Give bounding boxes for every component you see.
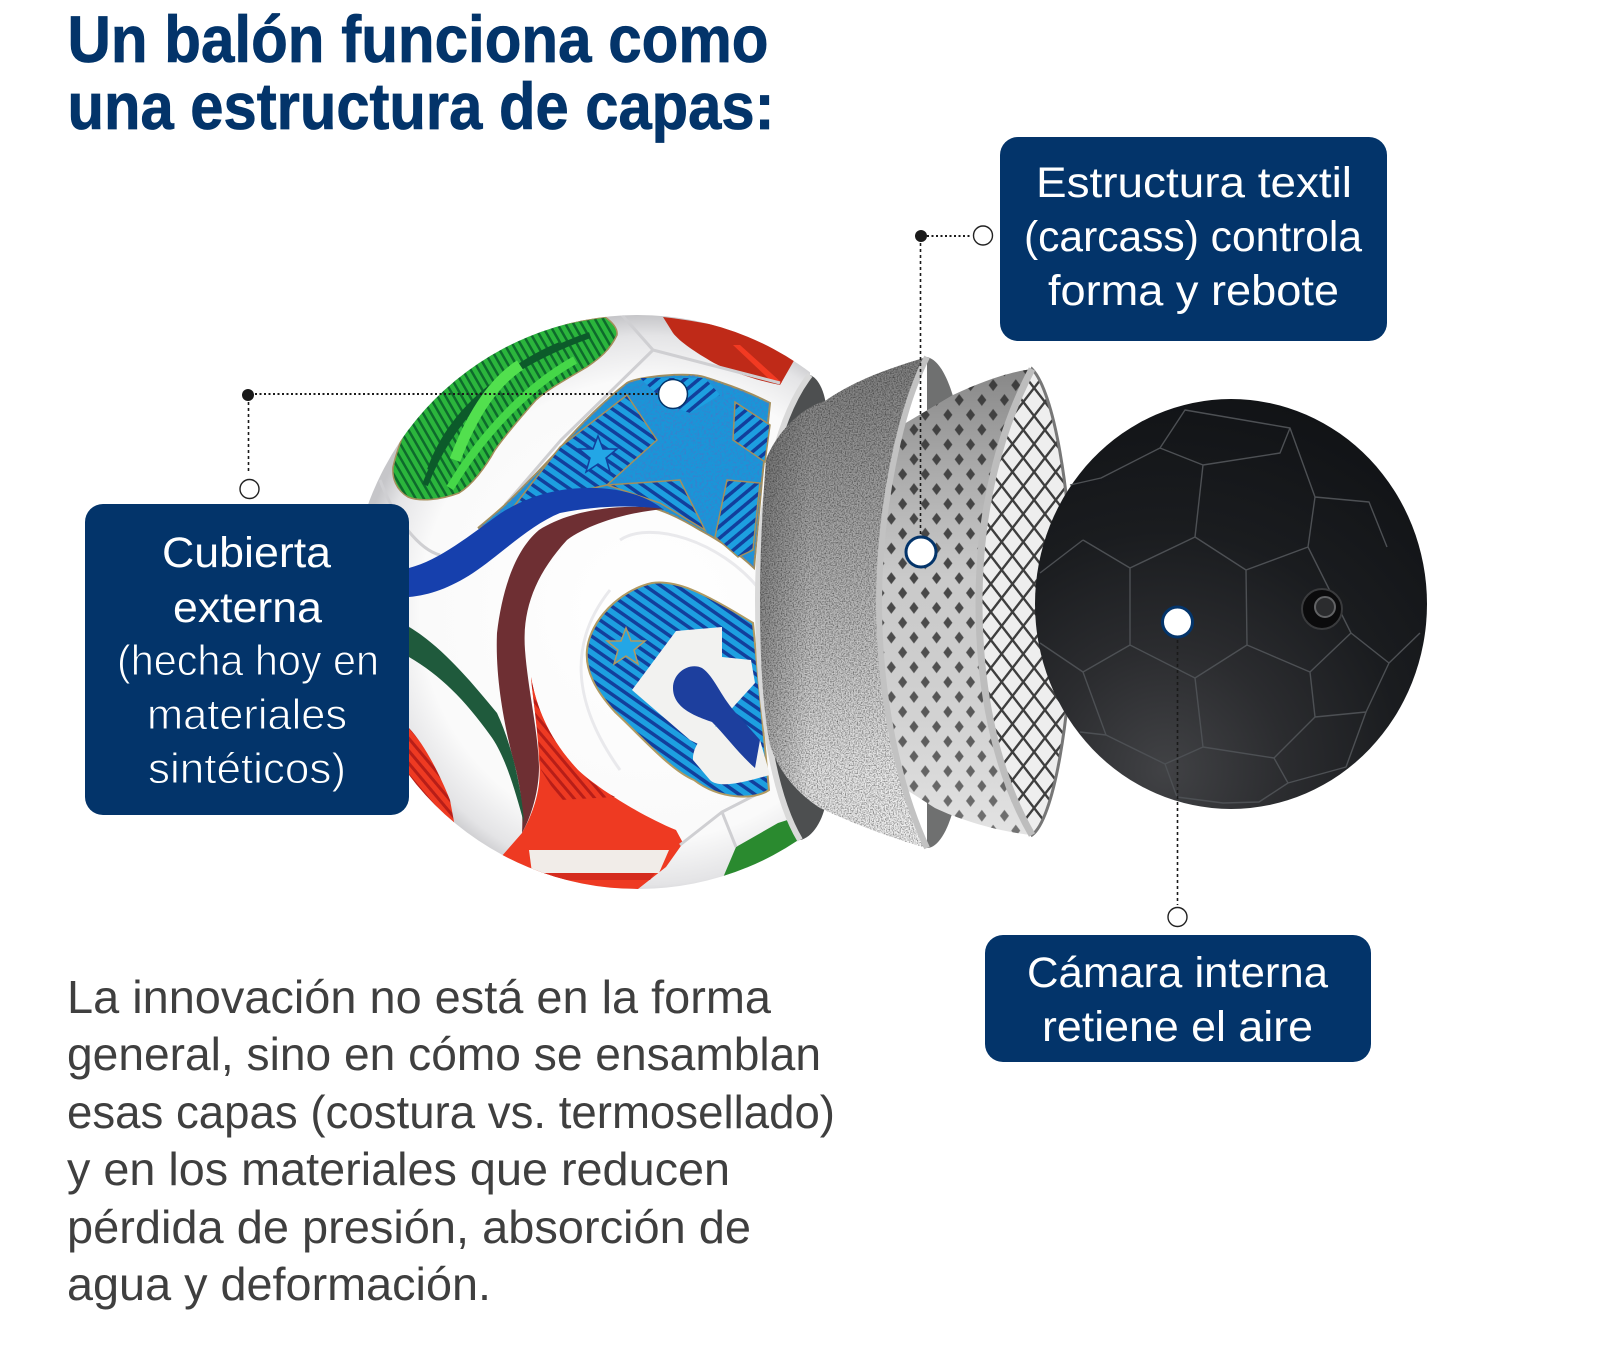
dark green swoosh [409,627,524,823]
maroon swoosh [497,507,664,833]
callout: cubierta externa: sintéticos) [148,745,346,793]
callout: cubierta externa: Cubierta [162,529,331,577]
body paragraph: general, sino en cómo se ensamblan [67,1028,821,1080]
panel seams [679,796,756,848]
callout: estructura textil [1000,137,1387,341]
exploded ball illustration [340,300,1427,900]
connector: bladder [1162,607,1192,926]
connector: carcass [906,226,992,567]
callout: estructura textil: Estructura textil [1036,159,1352,207]
outer cover rim [758,375,810,840]
carcass rim [979,369,1032,835]
callout: cubierta externa: materiales [147,691,347,739]
callout: estructura textil: forma y rebote [1048,267,1339,315]
title: Un balón funciona como [68,2,768,76]
white seams [379,315,780,630]
body paragraph: pérdida de presión, absorción de [67,1201,751,1253]
valve [1302,589,1342,629]
trophy [673,666,760,768]
connector: cover [240,380,688,498]
callout: cubierta externa: (hecha hoy en [117,637,379,685]
textile carcass outside [860,369,1032,835]
red bottom panel [501,677,683,889]
body paragraph: La innovación no está en la forma [67,971,771,1023]
red top panel [663,317,796,385]
callout: estructura textil: (carcass) controla [1024,213,1362,261]
body paragraph: esas capas (costura vs. termosellado) [67,1086,835,1138]
green top panel [393,317,617,500]
foam layer [760,357,927,848]
carcass lattice interior [979,369,1072,835]
outer cover ball [368,315,810,889]
title [68,2,774,143]
inner black bladder [1035,399,1427,809]
callout: cámara interna [985,935,1371,1062]
green bottom panel [724,820,797,876]
callout: cámara interna: retiene el aire [1042,1003,1313,1051]
blue logo panel [587,582,770,797]
callout: cubierta externa [85,504,409,815]
bladder seams [1040,410,1420,803]
blue swoosh [409,488,664,597]
callout: cámara interna: Cámara interna [1027,949,1328,997]
white 26 logo [632,627,755,745]
red left panel [409,728,455,827]
foam inner shell [927,357,953,848]
inner shell of outer cover [758,375,826,840]
body paragraph [67,971,835,1310]
blue star panel [478,375,770,568]
body paragraph: y en los materiales que reducen [67,1143,730,1195]
callout: cubierta externa: externa [173,584,322,632]
body paragraph: agua y deformación. [67,1258,491,1310]
title: una estructura de capas: [68,69,774,143]
